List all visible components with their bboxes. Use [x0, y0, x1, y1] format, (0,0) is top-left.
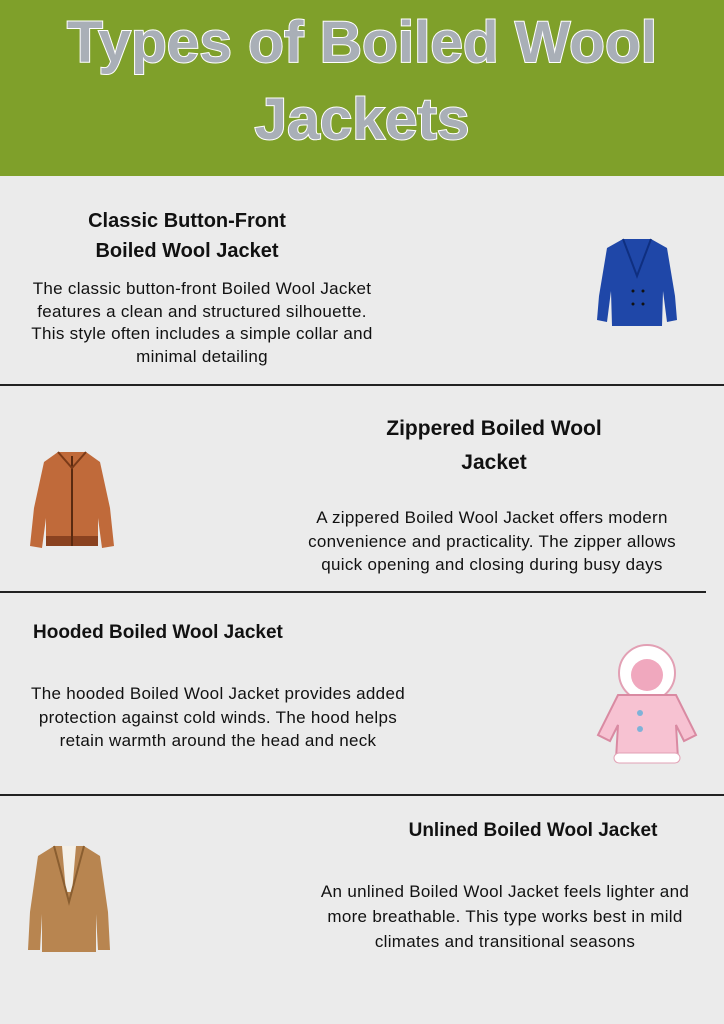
text: The classic button-front Boiled Wool Jacket — [33, 279, 371, 298]
panel: classic button-front — [31, 210, 677, 366]
icon: leather jacket — [30, 451, 114, 548]
icon: tan blazer — [28, 846, 110, 952]
panel: zippered — [30, 417, 676, 574]
title: Types of Boiled Wool — [67, 10, 657, 75]
heading: Boiled Wool Jacket — [95, 240, 278, 262]
heading — [386, 417, 602, 474]
icon: pink hooded coat — [596, 644, 698, 764]
title: Jackets — [254, 87, 470, 152]
icon: blue jacket — [597, 238, 677, 326]
text: climates and transitional seasons — [375, 932, 635, 951]
text — [31, 684, 405, 750]
heading — [88, 210, 286, 262]
text — [31, 279, 373, 366]
text: convenience and practicality. The zipper allows — [308, 532, 676, 550]
text: retain warmth around the head and neck — [60, 731, 376, 750]
text: This style often includes a simple collar and — [31, 324, 373, 343]
text — [308, 508, 676, 574]
text: An unlined Boiled Wool Jacket feels lighter and — [321, 882, 689, 901]
text: minimal detailing — [136, 347, 268, 366]
text: protection against cold winds. The hood helps — [39, 708, 397, 726]
panel: hooded — [31, 622, 698, 764]
text — [321, 882, 689, 951]
text: features a clean and structured silhouette. — [37, 302, 367, 321]
text: quick opening and closing during busy days — [321, 555, 663, 574]
heading: Zippered Boiled Wool — [386, 417, 602, 440]
text: The hooded Boiled Wool Jacket provides added — [31, 684, 405, 703]
text: more breathable. This type works best in mild — [327, 907, 683, 926]
heading: Jacket — [461, 451, 527, 474]
title — [66, 10, 657, 152]
text: A zippered Boiled Wool Jacket offers modern — [316, 508, 668, 527]
heading: Hooded Boiled Wool Jacket — [33, 622, 283, 643]
panel: unlined — [28, 820, 689, 952]
heading: Classic Button-Front — [88, 210, 286, 232]
header banner — [0, 0, 724, 176]
heading: Unlined Boiled Wool Jacket — [409, 820, 657, 841]
